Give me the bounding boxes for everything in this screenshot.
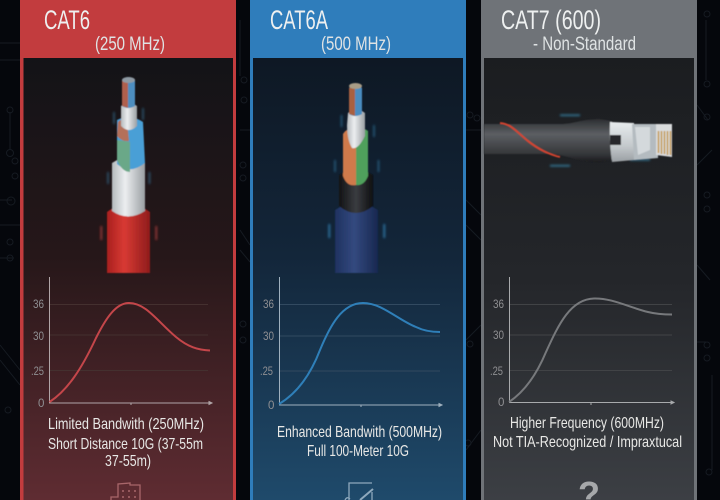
chart: CAT7 bandwidth curve: 36 — [493, 299, 504, 311]
cable illustration: CAT6A — [328, 83, 385, 273]
chart: CAT6 bandwidth curve: 36 — [33, 299, 44, 311]
description: CAT7 — [493, 415, 682, 451]
chart: CAT6A bandwidth curve: .25 — [260, 366, 273, 378]
panel: CAT6 — [20, 0, 236, 500]
description: CAT6 — [48, 416, 204, 470]
heading: CAT6: CAT6 — [44, 5, 90, 35]
heading: CAT6A: CAT6A — [270, 5, 328, 35]
chart: CAT7 bandwidth curve — [490, 277, 674, 409]
description: CAT6: Short Distance 10G (37-55m — [48, 436, 203, 453]
chart: CAT6A bandwidth curve: 0 — [268, 400, 274, 412]
subheading: 250 MHz: (250 MHz) — [95, 34, 165, 55]
subheading: Non-Standard: - Non-Standard — [533, 34, 636, 55]
heading: CAT7 (600): CAT7 (600) — [501, 5, 601, 35]
panel: CAT6A — [250, 0, 466, 500]
description: CAT6: Limited Bandwith (250MHz) — [48, 416, 204, 433]
cable illustration: CAT6 — [100, 77, 157, 273]
chart: CAT6 bandwidth curve: 30 — [33, 331, 44, 343]
chart: CAT7 bandwidth curve: 30 — [493, 330, 504, 342]
chart: CAT6A bandwidth curve — [260, 277, 442, 412]
description: CAT6A: Enhanced Bandwith (500MHz) — [277, 424, 442, 441]
cable illustration: CAT7 plug — [484, 114, 672, 166]
description: CAT7: Higher Frequency (600MHz) — [510, 415, 664, 432]
chart: CAT6A bandwidth curve: 36 — [263, 299, 274, 311]
description: CAT6: 37-55m) — [105, 453, 151, 470]
chart: CAT6 bandwidth curve: .25 — [31, 366, 44, 378]
subheading: 500 MHz: (500 MHz) — [321, 34, 391, 55]
panel: CAT7 — [481, 0, 697, 500]
description: CAT6A — [277, 424, 442, 460]
chart: CAT6 bandwidth curve: 0 — [38, 398, 44, 410]
chart: CAT7 bandwidth curve: 0 — [498, 397, 504, 409]
icon: clipboard with pencil — [345, 483, 373, 500]
chart: CAT7 bandwidth curve: .25 — [490, 366, 503, 378]
chart: CAT6A bandwidth curve: 30 — [263, 331, 274, 343]
description: CAT6A: Full 100-Meter 10G — [307, 443, 409, 460]
icon: building — [111, 483, 140, 500]
chart: CAT6 bandwidth curve — [31, 277, 212, 410]
